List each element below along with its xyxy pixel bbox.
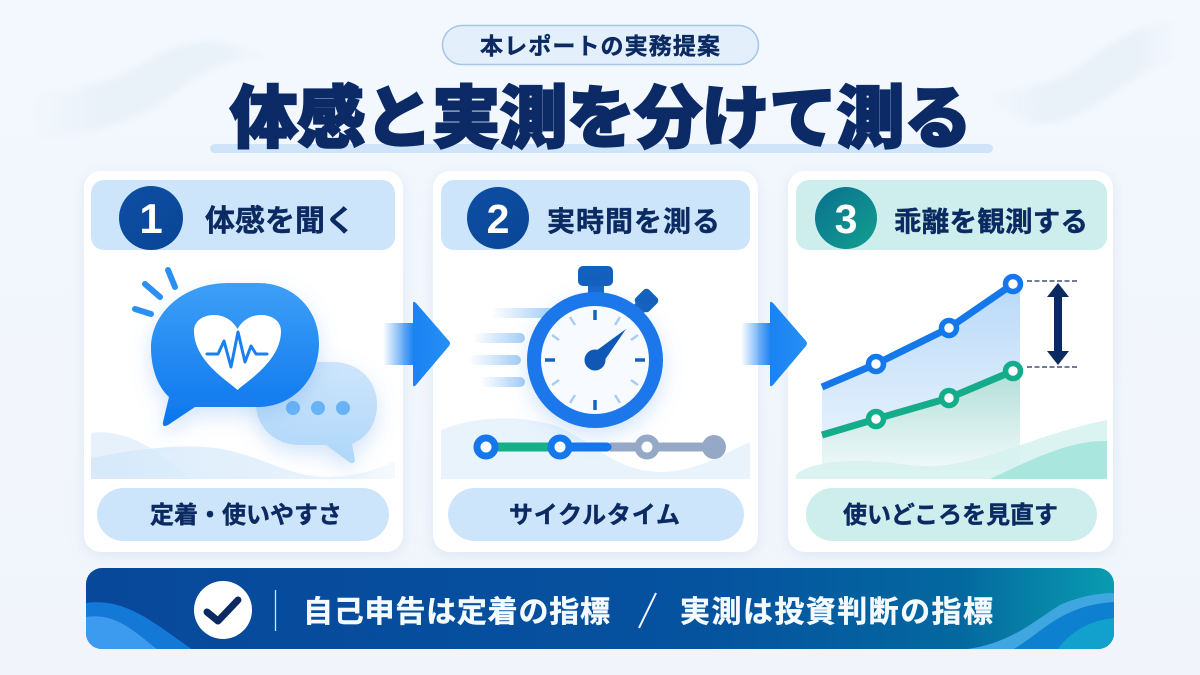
panel 2 header: 実時間を測る — [547, 200, 720, 240]
title: 体感と実測を分けて測る — [230, 63, 972, 162]
banner statement: 実測は投資判断の指標 — [680, 587, 993, 631]
icon: stopwatch — [527, 266, 663, 428]
panel 1 header: 体感を聞く — [205, 196, 355, 240]
panel 1 waves — [91, 432, 395, 479]
icon: check mark — [194, 581, 252, 639]
banner waves — [86, 593, 1114, 650]
icon: heart speech bubble — [135, 270, 319, 426]
arrow 2 — [741, 302, 807, 386]
gap indicator arrow — [1027, 281, 1079, 367]
panel 3 header: 3 — [835, 196, 857, 242]
panel 1 footer label: 定着・使いやすさ — [150, 495, 342, 530]
arrow 1 — [383, 302, 450, 386]
badge: report proposal: 本レポートの実務提案 — [480, 27, 720, 61]
panel 2 footer label: サイクルタイム — [509, 495, 680, 530]
icon: speed lines — [468, 308, 555, 387]
timeline — [477, 435, 726, 459]
line chart — [822, 276, 1020, 470]
panel 3 footer label — [806, 488, 1097, 541]
panel 3 header: 乖離を観測する — [894, 199, 1088, 239]
panel 1: listen to perception — [84, 171, 403, 552]
panel 1 header: 1 — [139, 195, 163, 242]
bottom banner — [86, 568, 1114, 650]
panel 2: measure real time — [433, 171, 758, 552]
panel 2 header — [441, 180, 750, 250]
banner statement — [303, 587, 993, 631]
panel 2 footer label — [448, 488, 744, 541]
panel 2 waves — [441, 418, 750, 479]
icon: second speech bubble — [256, 362, 377, 463]
panel 1 header — [91, 180, 395, 250]
badge: report proposal — [442, 26, 758, 64]
panel 3: observe the gap — [788, 171, 1113, 552]
panel 3 footer label: 使いどころを見直す — [843, 495, 1058, 530]
banner statement: 自己申告は定着の指標 — [303, 587, 610, 631]
panel 1 footer label — [97, 488, 389, 541]
panel 3 waves — [796, 420, 1107, 479]
panel 2 header: 2 — [487, 196, 509, 242]
panel 3 header — [796, 180, 1107, 250]
